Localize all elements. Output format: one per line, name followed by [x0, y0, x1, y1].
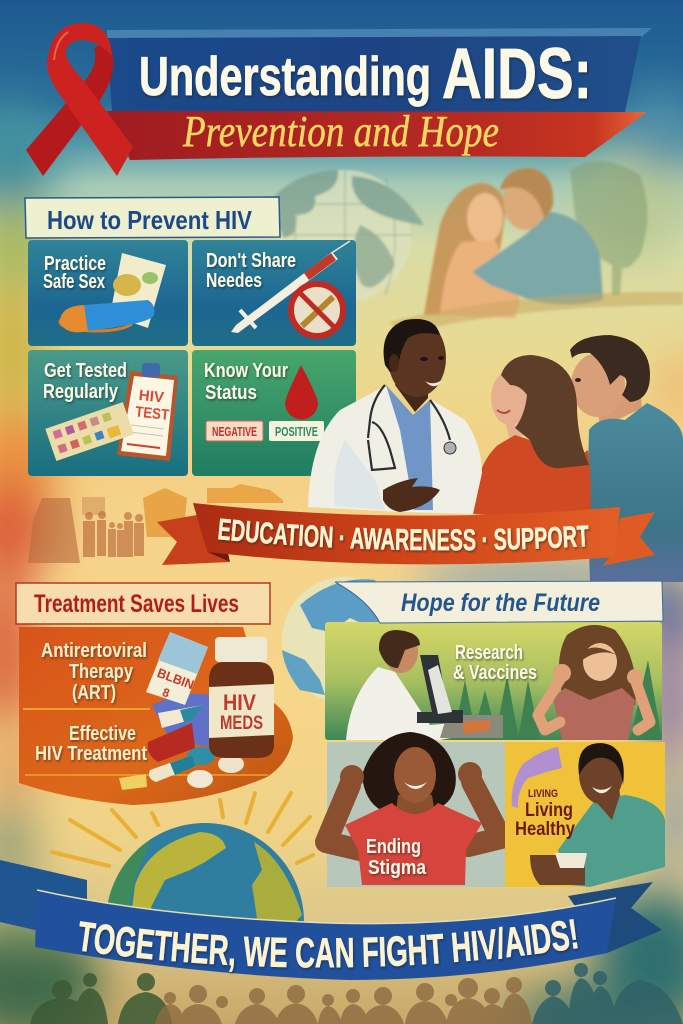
panel: how to prevent HIV — [25, 197, 356, 476]
faded couple embracing — [390, 168, 683, 335]
face — [395, 795, 436, 820]
icon: pile of pills — [119, 694, 244, 790]
card: living healthy — [505, 742, 665, 887]
card: ending stigma — [326, 732, 505, 887]
card: practice safe sex: Practice — [44, 253, 106, 275]
icon: medicine box: 8 — [161, 685, 172, 701]
left group — [30, 973, 172, 1024]
card: know your status: Status — [205, 382, 257, 404]
faded village and people silhouettes — [28, 484, 283, 563]
right group — [532, 963, 683, 1024]
woman in red top — [473, 355, 591, 522]
panel: treatment saves lives — [16, 583, 293, 805]
ribbon text: TOGETHER, WE CAN FIGHT HIV/AIDS! — [79, 919, 580, 975]
card: know your status: Know Your — [204, 360, 288, 382]
right ribbon tail — [568, 882, 662, 953]
left ribbon tail — [0, 860, 87, 930]
heading: Hope for the Future: Hope for the Future — [401, 589, 600, 617]
group of people — [83, 511, 144, 557]
card: get tested regularly: Regularly — [43, 381, 119, 403]
icon: medicine box: BLBIN — [155, 665, 196, 692]
arms — [326, 785, 360, 850]
icon: HIV meds bottle — [209, 637, 274, 758]
card: don't share needles: Don't Share — [206, 250, 296, 272]
card: living healthy: LIVING — [528, 788, 558, 800]
man's sweater — [472, 212, 603, 305]
card: know your status: NEGATIVE — [212, 425, 257, 439]
heading text: Understanding — [139, 45, 431, 107]
card: living healthy: Living — [525, 800, 573, 821]
centre group — [155, 977, 532, 1024]
faded globe behind couple — [268, 170, 424, 302]
card: ending stigma: Ending — [366, 836, 421, 858]
globe — [106, 823, 304, 950]
text: antiretroviral therapy: Therapy — [69, 661, 134, 683]
orange buildings — [143, 488, 187, 537]
pale building — [82, 497, 105, 515]
hair — [362, 732, 456, 815]
card: practice safe sex — [28, 240, 188, 346]
card: ending stigma: Stigma — [368, 857, 427, 879]
card: get tested regularly: Get Tested — [44, 360, 127, 382]
woman with raised fists — [538, 625, 650, 740]
banner: together we can fight HIV/AIDS — [0, 860, 662, 980]
panel: hope for the future — [282, 577, 665, 887]
card: know your status: POSITIVE — [275, 425, 318, 439]
woman's face and shoulders — [467, 193, 503, 243]
doctor in white coat — [308, 319, 482, 514]
card: research and vaccines — [325, 622, 662, 740]
ribbon body — [35, 890, 616, 980]
title banner — [107, 28, 652, 160]
text: antiretroviral therapy: Effective — [69, 723, 136, 745]
heading: Treatment Saves Lives: Treatment Saves Lives — [34, 590, 239, 618]
icon: earth with sun rays — [52, 793, 313, 950]
text: antiretroviral therapy: Antirertoviral — [41, 640, 147, 662]
heading: Treatment Saves Lives — [16, 583, 270, 624]
illustration: doctor talking with couple — [308, 319, 683, 582]
card: don't share needles: Needes — [206, 270, 262, 292]
red subtitle band — [107, 111, 647, 160]
card: living healthy: Healthy — [515, 819, 575, 840]
man in teal shirt — [570, 335, 683, 582]
ribbon tails — [157, 515, 230, 565]
icon: red AIDS ribbon — [26, 23, 133, 176]
text: antiretroviral therapy — [23, 640, 268, 775]
ribbon text: EDUCATION · AWARENESS · SUPPORT — [218, 518, 591, 554]
man's head — [503, 170, 547, 230]
card: research and vaccines: Research — [455, 642, 523, 664]
icon: HIV meds bottle: HIV — [223, 690, 256, 715]
card: get tested regularly: HIV — [138, 387, 165, 406]
card: practice safe sex: Safe Sex — [43, 271, 105, 293]
card: get tested regularly — [28, 350, 188, 476]
domed tower — [28, 498, 80, 563]
ribbon body — [193, 503, 620, 564]
heading: How to Prevent HIV: How to Prevent HIV — [47, 205, 253, 235]
sun rays — [52, 793, 313, 866]
icon: medicine box — [146, 632, 208, 705]
blue-green globe — [282, 577, 408, 703]
researcher at microscope — [346, 630, 503, 740]
text: antiretroviral therapy: HIV Treatment — [35, 743, 147, 765]
title banner: AIDS: — [442, 35, 592, 114]
heading: Hope for the Future — [335, 581, 663, 623]
text: antiretroviral therapy: (ART) — [72, 682, 116, 704]
faded tree — [570, 161, 648, 295]
subtitle text: Prevention and Hope — [182, 107, 499, 156]
card: get tested regularly: TEST — [134, 403, 170, 424]
shirt — [345, 803, 482, 885]
crowd silhouettes — [30, 963, 683, 1024]
heading: How to Prevent HIV — [25, 197, 280, 238]
banner: education awareness support — [157, 503, 655, 566]
card: don't share needles — [192, 240, 356, 346]
woman's hair — [424, 183, 505, 315]
orange treatment panel — [19, 627, 293, 805]
card: research and vaccines: & Vaccines — [453, 662, 537, 684]
card: know your status — [192, 350, 356, 476]
pale highlight strip — [107, 28, 652, 38]
blue title band — [107, 36, 641, 112]
icon: HIV meds bottle: MEDS — [220, 713, 263, 734]
